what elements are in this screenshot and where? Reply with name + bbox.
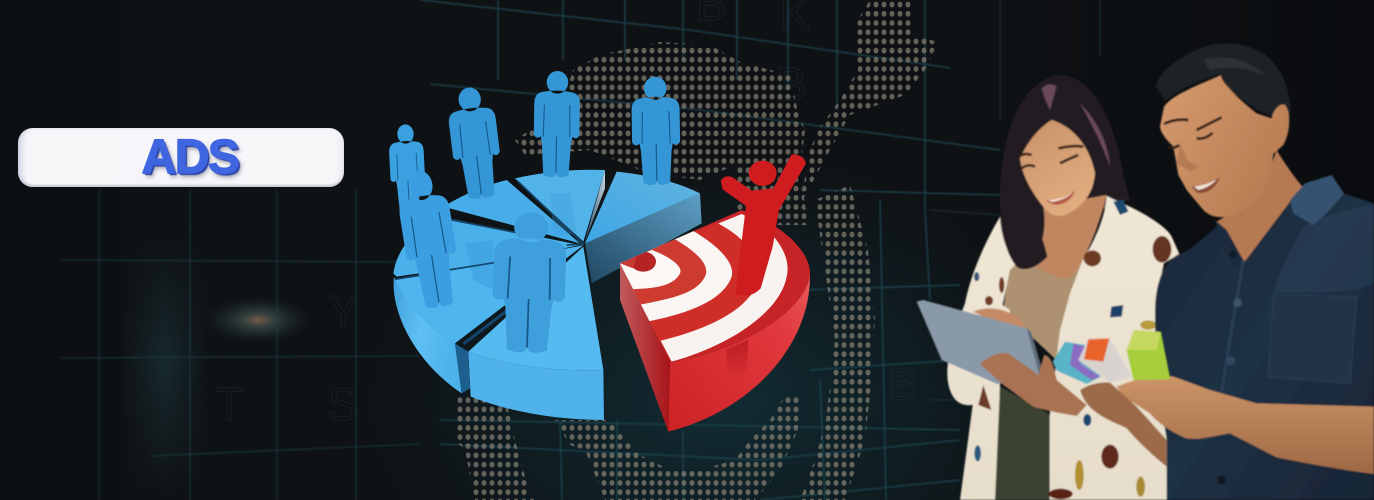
illustration: segmented 3D pie chart with people and red target	[389, 71, 810, 432]
shirt highlight	[1273, 205, 1374, 293]
figure reflections on pie	[465, 193, 577, 290]
man smile	[1192, 177, 1219, 193]
placket line and buttons	[1217, 250, 1243, 484]
nose shadow	[1177, 143, 1200, 172]
shirt	[1155, 175, 1374, 500]
person: back right	[631, 76, 681, 185]
collar	[1290, 175, 1344, 225]
green block	[1127, 330, 1170, 380]
purple stripe	[1070, 343, 1100, 380]
figure reflection on target side	[727, 340, 748, 378]
face	[1160, 75, 1289, 217]
orange block top	[1084, 338, 1109, 362]
teal block	[1053, 342, 1101, 384]
label: ADS button	[18, 128, 344, 187]
blue pie: back right slice	[585, 172, 702, 283]
inner top base	[1003, 250, 1090, 367]
woman smile	[1045, 191, 1075, 205]
blue pie: back left slice	[443, 180, 580, 243]
red target slice	[613, 203, 817, 432]
blue pie: left slice	[393, 217, 580, 277]
white block	[1078, 338, 1132, 383]
eyes and brows	[1019, 146, 1083, 168]
left collar	[1215, 220, 1243, 270]
dotted world map	[455, 0, 938, 500]
tablet	[917, 300, 1044, 384]
blue pie: back top slice	[515, 170, 605, 244]
hair	[1156, 43, 1291, 130]
pocket	[1268, 295, 1357, 383]
faint background characters	[215, 0, 919, 430]
neck	[1217, 150, 1303, 263]
front hair lock	[1000, 127, 1047, 269]
grid lines	[60, 0, 1100, 500]
person: back left	[445, 85, 505, 201]
heading: ADS: ADS	[142, 131, 238, 184]
faint background characters: Y	[328, 286, 359, 338]
kimono spots	[974, 200, 1171, 499]
neck	[1033, 195, 1107, 278]
man	[1053, 43, 1374, 500]
person: back centre	[533, 71, 580, 178]
person: centre front	[491, 211, 568, 354]
brows and eyes	[1164, 117, 1222, 148]
faint background characters: T	[215, 378, 243, 430]
upper hand	[973, 308, 1023, 327]
slice gaps	[395, 182, 584, 344]
person: far left	[388, 124, 427, 215]
hair highlight	[1203, 57, 1267, 77]
other hand and wrist	[1080, 382, 1167, 467]
person: left front	[393, 167, 465, 311]
blue pie: front slice	[468, 247, 604, 420]
hair parting and shine	[1042, 84, 1110, 167]
hair back layer	[1000, 75, 1130, 243]
faint background characters: B	[888, 358, 919, 410]
lower hand and arm	[980, 353, 1087, 416]
faint background characters: B	[776, 58, 807, 110]
forearm and hand	[1117, 376, 1374, 474]
side wedge gap	[455, 343, 470, 393]
face	[1020, 120, 1095, 216]
skirt	[995, 387, 1048, 500]
background: dark tech grid with dotted world map	[60, 0, 1101, 500]
woman	[917, 75, 1179, 500]
blue pie: front left slice	[394, 245, 583, 393]
kimono right panel	[1049, 196, 1179, 500]
target rings	[620, 210, 810, 362]
tablet edge	[1027, 328, 1044, 380]
lens glow	[203, 296, 313, 344]
faint background characters: S	[328, 378, 359, 430]
kimono left panel	[947, 217, 1017, 500]
red winner figure	[721, 154, 806, 296]
